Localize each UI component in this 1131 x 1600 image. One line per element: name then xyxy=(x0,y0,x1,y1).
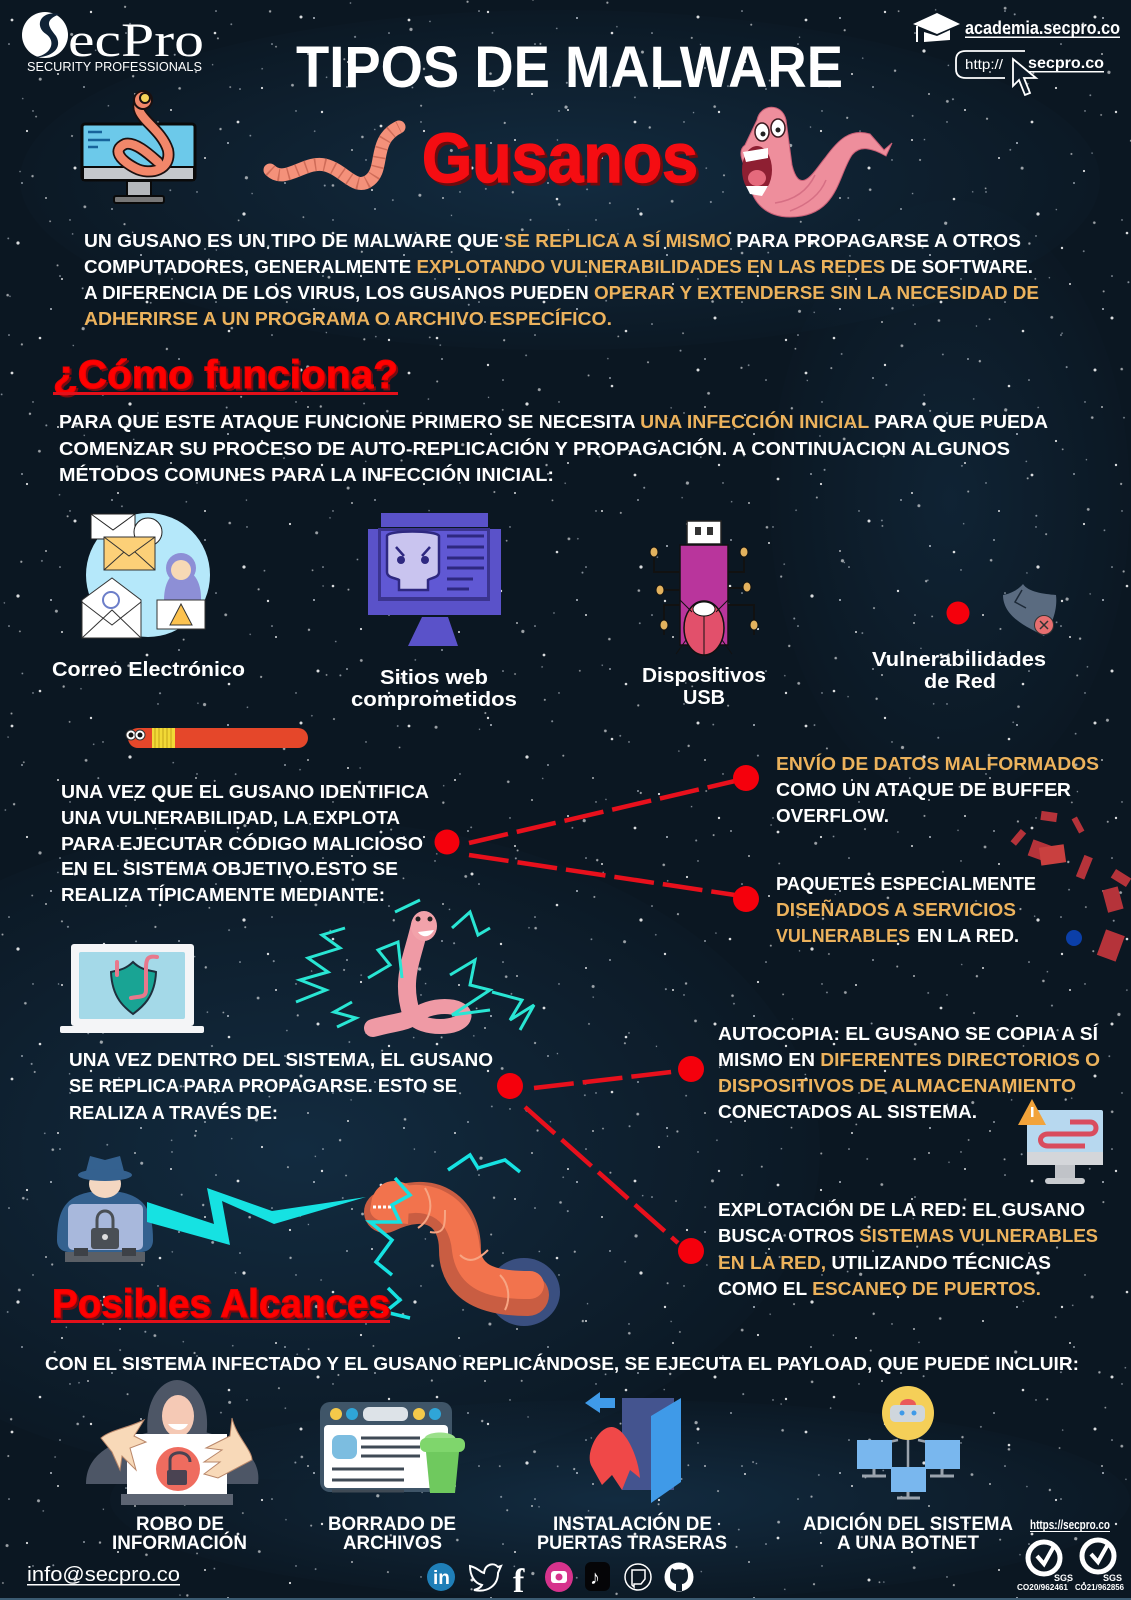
icon: blue dot xyxy=(1066,930,1082,946)
text block: crafted packets: PAQUETES ESPECIALMENTE xyxy=(776,874,1036,894)
icon: screaming worm xyxy=(741,107,892,217)
academy link xyxy=(913,13,1120,42)
text block: crafted packets: EN LA RED. xyxy=(917,926,1019,946)
certification seals: CO20/962461 xyxy=(1017,1583,1069,1592)
label: Vulnerabilidades de Red: de Red xyxy=(924,671,996,693)
label: Robo de información: ROBO DE xyxy=(136,1514,224,1535)
icon: hacker with padlock xyxy=(57,1156,153,1262)
panel: infection methods xyxy=(52,513,1056,711)
connector: exploit branches xyxy=(434,765,759,912)
certification seals: SGS xyxy=(1054,1573,1073,1583)
arrow: lightning bolt xyxy=(147,1188,366,1245)
text block: exploit: EN EL SISTEMA OBJETIVO.ESTO SE xyxy=(61,859,398,879)
panel: header xyxy=(22,12,1120,329)
label: Borrado de archivos: BORRADO DE xyxy=(328,1514,456,1535)
connector: replication branches xyxy=(497,1056,704,1264)
icon: bot network xyxy=(857,1386,960,1498)
heading: ¿Cómo funciona?: ¿Cómo funciona? xyxy=(55,355,400,399)
label: Instalación de puertas traseras: INSTALACIÓN DE xyxy=(553,1513,712,1535)
label: Borrado de archivos xyxy=(328,1514,456,1554)
heading: Posibles Alcances: Posibles Alcances xyxy=(52,1282,390,1326)
text block: infection intro: MÉTODOS COMUNES PARA LA INFECCIÓN INICIAL: xyxy=(59,464,554,485)
text block: definition: UN GUSANO ES UN TIPO DE MALWARE QUE SE REPLICA A SÍ MISMO PARA PROPAGARSE A OTROS xyxy=(84,230,1021,251)
logo SecPro: SECURITY PROFESSIONALS xyxy=(27,60,202,74)
icon: door with ghost xyxy=(585,1392,681,1503)
label: Adición del sistema a una botnet xyxy=(803,1513,1013,1554)
certification seals: SGS xyxy=(1103,1573,1122,1583)
label: Borrado de archivos: ARCHIVOS xyxy=(343,1533,442,1554)
icon: orange worm with sparks xyxy=(370,1155,560,1326)
text block: malformed data xyxy=(776,753,1099,826)
label: Instalación de puertas traseras: PUERTAS TRASERAS xyxy=(537,1533,727,1554)
label: Adición del sistema a una botnet: A UNA BOTNET xyxy=(837,1533,979,1554)
text block: network exploitation: COMO EL ESCANEO DE PUERTOS. xyxy=(718,1279,1041,1299)
outcome: file deletion xyxy=(320,1402,465,1554)
outcome: botnet xyxy=(803,1386,1013,1554)
icon: dancing worm with sparks xyxy=(296,900,534,1030)
icon: browser with trash xyxy=(320,1402,465,1493)
text block: definition xyxy=(84,230,1039,329)
outcome: data theft xyxy=(86,1380,258,1554)
email contact: info@secpro.co xyxy=(27,1564,180,1586)
label: Robo de información: INFORMACIÓN xyxy=(112,1532,247,1554)
social icons: f xyxy=(513,1563,525,1600)
label: Robo de información xyxy=(112,1514,247,1554)
text block: network exploitation: EXPLOTACIÓN DE LA RED: EL GUSANO xyxy=(718,1199,1085,1220)
text block: replication: REALIZA A TRAVÉS DE: xyxy=(69,1102,278,1123)
heading: Gusanos: Gusanos xyxy=(422,119,698,197)
text block: network exploitation xyxy=(718,1199,1098,1299)
certification seals: CO21/962856 xyxy=(1075,1583,1125,1592)
icon: monitor with warning xyxy=(1018,1099,1103,1184)
label: Adición del sistema a una botnet: ADICIÓN DEL SISTEMA xyxy=(803,1513,1013,1535)
text block: infection intro: COMENZAR SU PROCESO DE AUTO-REPLICACIÓN Y PROPAGACIÓN. A CONTINUACION ALGUNOS xyxy=(59,438,1010,459)
text block: malformed data: OVERFLOW. xyxy=(776,806,889,826)
logo SecPro: ecPro xyxy=(68,14,204,67)
text block: replication xyxy=(69,1050,493,1123)
icon: worm in monitor xyxy=(82,91,195,203)
text block: autocopy: AUTOCOPIA: EL GUSANO SE COPIA A SÍ xyxy=(718,1023,1099,1044)
title: TIPOS DE MALWARE xyxy=(296,35,843,100)
text block: payload intro: CON EL SISTEMA INFECTADO Y EL GUSANO REPLICÁNDOSE, SE EJECUTA EL PAYLOAD, QUE PUEDE INCLUIR: xyxy=(45,1353,1079,1374)
icon: email attack xyxy=(82,513,210,638)
icon: hooded hacker with laptop xyxy=(86,1380,258,1505)
text block: autocopy xyxy=(718,1023,1100,1122)
text block: exploit: PARA EJECUTAR CÓDIGO MALICIOSO xyxy=(61,833,423,854)
text block: exploit: REALIZA TÍPICAMENTE MEDIANTE: xyxy=(61,884,385,905)
text block: definition: COMPUTADORES, GENERALMENTE EXPLOTANDO VULNERABILIDADES EN LAS REDES DE SOFTWARE. xyxy=(84,257,1033,277)
text block: autocopy: MISMO EN DIFERENTES DIRECTORIOS O xyxy=(718,1050,1100,1070)
label: Sitios web comprometidos: Sitios web xyxy=(380,667,488,689)
label: Dispositivos USB: Dispositivos xyxy=(642,665,766,687)
panel: possible outcomes xyxy=(86,1380,1013,1554)
label: Dispositivos USB xyxy=(642,665,766,709)
heading: Posibles Alcances: Posibles Alcances xyxy=(54,1284,392,1328)
icon: scattered red envelopes xyxy=(1011,811,1131,962)
text block: crafted packets: DISEÑADOS A SERVICIOS xyxy=(776,899,1016,920)
logo SecPro xyxy=(22,12,204,74)
text block: definition: ADHERIRSE A UN PROGRAMA O ARCHIVO ESPECÍFICO. xyxy=(84,308,612,329)
social icons: in xyxy=(433,1568,450,1589)
social icons xyxy=(427,1562,694,1600)
icon: broken shield xyxy=(1003,584,1056,636)
text block: exploit xyxy=(61,782,429,905)
method: USB xyxy=(642,521,766,709)
label: Vulnerabilidades de Red xyxy=(872,649,1046,693)
label: Correo Electrónico: Correo Electrónico xyxy=(52,659,245,681)
text block: crafted packets xyxy=(776,874,1036,946)
icon: laptop with shield xyxy=(60,944,204,1033)
label: Vulnerabilidades de Red: Vulnerabilidades xyxy=(872,649,1046,671)
method: network vulnerabilities xyxy=(872,584,1056,693)
text block: autocopy: DISPOSITIVOS DE ALMACENAMIENTO xyxy=(718,1076,1076,1096)
text block: crafted packets: VULNERABLES xyxy=(776,926,910,946)
outcome: backdoors xyxy=(537,1392,727,1554)
label: Sitios web comprometidos: comprometidos xyxy=(351,689,517,711)
text block: malformed data: ENVÍO DE DATOS MALFORMADOS xyxy=(776,753,1099,774)
panel: footer xyxy=(27,1517,1125,1600)
text block: infection intro: PARA QUE ESTE ATAQUE FUNCIONE PRIMERO SE NECESITA UNA INFECCIÓN INICIAL PARA QUE PUEDA xyxy=(59,411,1048,432)
text block: definition: A DIFERENCIA DE LOS VIRUS, LOS GUSANOS PUEDEN OPERAR Y EXTENDERSE SIN LA NECESIDAD DE xyxy=(84,283,1039,303)
icon: red dot xyxy=(946,602,970,624)
text block: exploit: UNA VEZ QUE EL GUSANO IDENTIFICA xyxy=(61,782,429,802)
method: compromised websites xyxy=(351,513,517,711)
text block: network exploitation: BUSCA OTROS SISTEMAS VULNERABLES xyxy=(718,1226,1098,1246)
icon: USB bug xyxy=(650,521,758,655)
icon: left worm xyxy=(270,127,399,184)
heading: Gusanos: Gusanos xyxy=(425,122,701,200)
text block: exploit: UNA VULNERABILIDAD, LA EXPLOTA xyxy=(61,808,400,828)
social icons: ♪ xyxy=(590,1567,600,1589)
website link box: http:// xyxy=(965,56,1003,72)
method: email xyxy=(52,513,245,681)
website link box xyxy=(956,51,1104,95)
icon: small orange worm xyxy=(126,728,308,748)
text block: replication: UNA VEZ DENTRO DEL SISTEMA, EL GUSANO xyxy=(69,1050,493,1070)
icon: skull monitor xyxy=(368,513,501,646)
label: Dispositivos USB: USB xyxy=(683,687,725,709)
certification seals xyxy=(1017,1540,1125,1592)
text block: infection intro xyxy=(59,411,1048,485)
text block: replication: SE REPLICA PARA PROPAGARSE. ESTO SE xyxy=(69,1076,457,1096)
text block: malformed data: COMO UN ATAQUE DE BUFFER xyxy=(776,780,1071,800)
text block: autocopy: CONECTADOS AL SISTEMA. xyxy=(718,1102,977,1122)
label: Sitios web comprometidos xyxy=(351,667,517,711)
text block: network exploitation: EN LA RED, UTILIZANDO TÉCNICAS xyxy=(718,1252,1051,1273)
heading: ¿Cómo funciona?: ¿Cómo funciona? xyxy=(53,353,398,397)
website link box: secpro.co xyxy=(1028,55,1104,72)
label: Instalación de puertas traseras xyxy=(537,1513,727,1554)
